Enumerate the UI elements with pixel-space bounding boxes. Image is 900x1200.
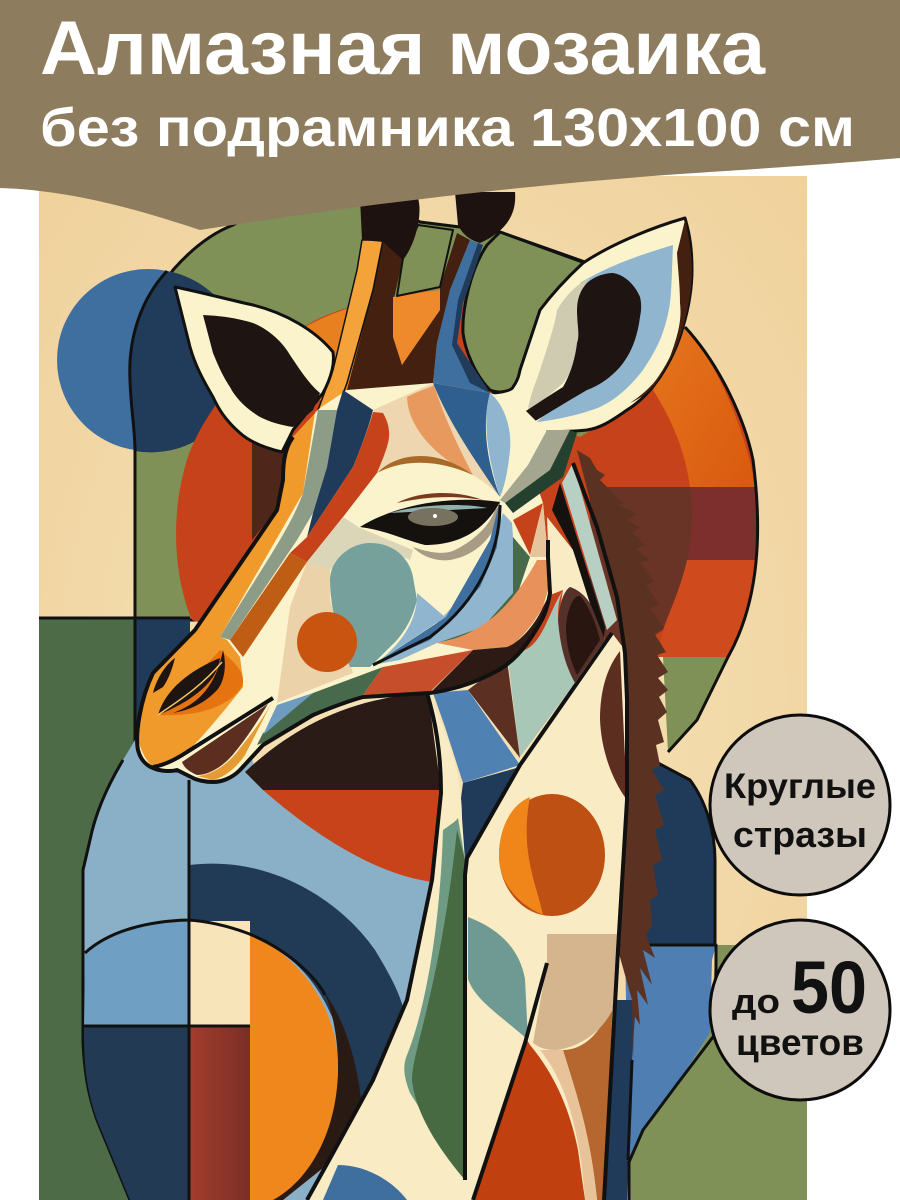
blue circle <box>57 269 242 452</box>
inner cream strip and ribbon <box>307 693 465 1200</box>
badge: up to 50 colours: 50 <box>791 946 867 1029</box>
light blue cheek <box>373 593 445 665</box>
cheek pale area <box>307 517 413 570</box>
nose shade <box>160 650 243 715</box>
horns <box>318 192 515 410</box>
title: Алмазная мозаика <box>40 6 766 91</box>
teal cheek shape <box>330 543 417 667</box>
neck dark hollow <box>558 587 605 683</box>
right face stripes <box>373 500 548 665</box>
badge: round rhinestones: стразы <box>733 814 867 855</box>
forehead blue <box>433 383 500 497</box>
head base <box>137 383 550 782</box>
cheek orange spot <box>297 612 357 672</box>
mane <box>577 450 668 1060</box>
panel: giraffe painting <box>39 176 807 1200</box>
nostrils <box>158 658 220 715</box>
badge: up to 50 colours: до <box>732 983 780 1021</box>
navy stripe <box>307 390 373 537</box>
lower left blocks <box>39 450 440 1200</box>
dark and red chest blocks <box>245 590 575 882</box>
mane line <box>573 463 627 1200</box>
red stripe <box>290 412 389 562</box>
neck teal leaf <box>468 917 528 1040</box>
badge: up to 50 colours <box>710 920 890 1100</box>
forehead feather <box>407 385 473 475</box>
head outline <box>137 437 550 782</box>
header banner <box>0 0 900 230</box>
head join to ear <box>500 430 570 503</box>
mouth <box>182 704 268 775</box>
right ear <box>493 218 692 495</box>
jaw red <box>363 650 473 695</box>
painting background <box>39 176 807 1200</box>
left ear <box>175 287 333 452</box>
muzzle orange stripe <box>137 408 320 767</box>
badge: up to 50 colours: цветов <box>736 1022 864 1063</box>
subtitle: без подрамника 130х100 см <box>40 98 855 158</box>
badge: round rhinestones <box>710 715 890 895</box>
neck orange spot <box>499 794 605 916</box>
jaw dark <box>430 593 550 693</box>
jaw blue <box>263 693 313 735</box>
neck brown oval <box>600 651 627 800</box>
eye <box>360 493 500 560</box>
green patch right of horn <box>463 232 585 392</box>
neck lower shapes <box>563 997 613 1200</box>
brow line <box>377 456 473 475</box>
neck <box>465 633 627 1200</box>
forehead tan <box>373 383 500 497</box>
cheek tan <box>277 562 353 703</box>
red circle <box>176 290 758 752</box>
neck stripes behind head <box>547 463 617 683</box>
neck tan block <box>533 934 617 1050</box>
brown-orange stripe <box>230 553 307 657</box>
green arch <box>134 200 660 620</box>
jaw green <box>257 667 383 745</box>
lower right blocks <box>604 763 807 1200</box>
badge: round rhinestones: Круглые <box>724 767 876 806</box>
grey stripe <box>220 410 337 640</box>
giraffe head <box>137 383 577 782</box>
